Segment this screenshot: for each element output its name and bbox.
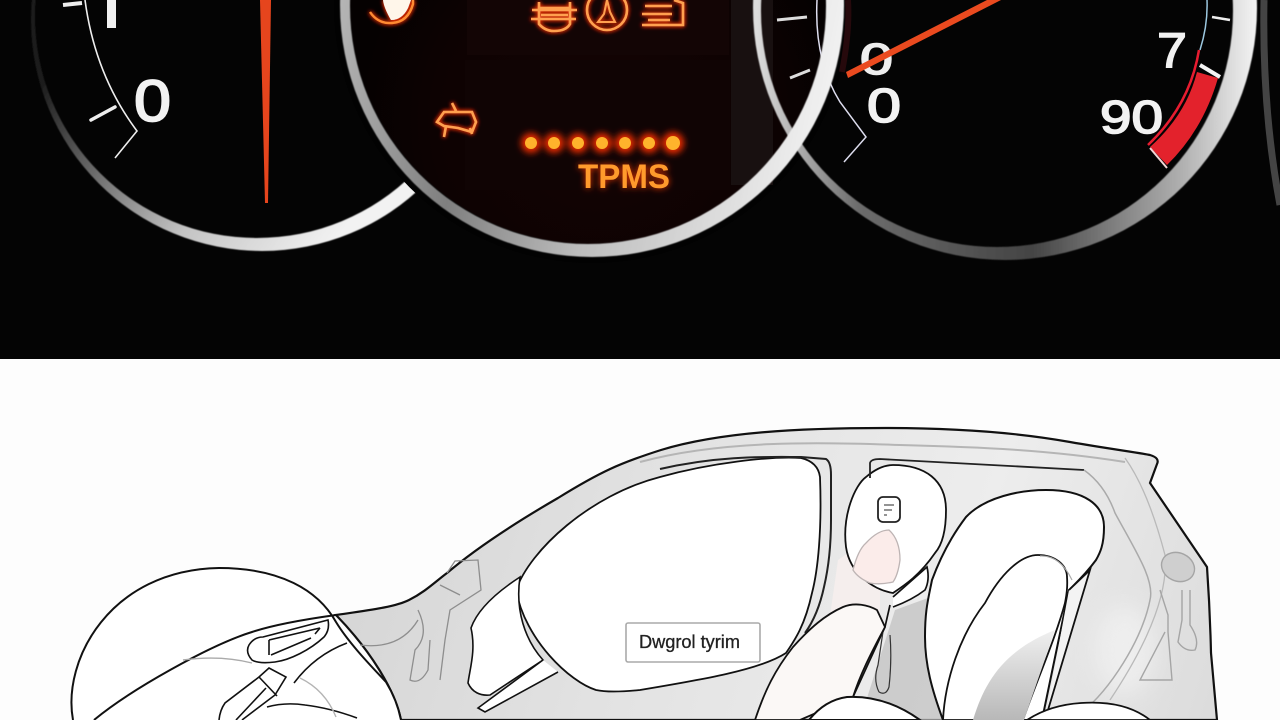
- needle: right gauge: [846, 0, 1001, 78]
- rear body details: [1140, 547, 1199, 680]
- lower door shading: [860, 598, 943, 720]
- rear door frame lines: [870, 458, 1165, 713]
- right gauge: [753, 0, 1257, 260]
- needle: left gauge: [260, 0, 271, 203]
- icon: rectangle symbol: [642, 0, 683, 25]
- steering wheel circle: [71, 568, 401, 720]
- stalk control upper: [248, 620, 328, 663]
- pillar seat belt: [853, 567, 928, 697]
- center gauge ring: [340, 0, 848, 257]
- warning icons row: [370, 0, 683, 137]
- digit: lower 0: 0: [867, 80, 901, 133]
- digit: 7: 7: [1157, 24, 1187, 78]
- seat shading: [973, 630, 1055, 720]
- center gauge face: [334, 0, 850, 263]
- front cushion: [809, 697, 920, 720]
- pillar shading: [815, 530, 880, 720]
- icon: small car symbol: [437, 103, 476, 137]
- mirror bar: [478, 660, 558, 712]
- red zone: [1148, 0, 1220, 168]
- car body silhouette: [336, 428, 1217, 720]
- body highlight haze: [1095, 605, 1155, 695]
- stalk control lower: [219, 643, 357, 720]
- dashboard gauge label: Dwgrol tyrim: [639, 632, 740, 652]
- digit: upper 0: 0: [860, 35, 893, 84]
- front seat outline: [755, 604, 885, 720]
- A-pillar details: [360, 560, 481, 681]
- window frame: [660, 457, 831, 633]
- icon: top-left warning glow: [370, 0, 413, 23]
- headrest shaded area: [853, 530, 900, 584]
- icon: headrest button: [878, 497, 900, 522]
- digit: 0 left gauge: 0: [134, 69, 171, 134]
- quarter window: [468, 577, 543, 695]
- rear seat strap: [1045, 570, 1090, 720]
- rear seat inner oval: [943, 555, 1072, 720]
- gray wheel line: [183, 658, 252, 663]
- panel: instrument cluster photo: [0, 0, 1280, 359]
- dashboard gauge label: [626, 623, 760, 662]
- rear seat shell: [925, 490, 1104, 720]
- icon: circled symbol: [587, 0, 627, 30]
- icon: stacked lines: [531, 2, 577, 31]
- TPMS indicator dots: [521, 132, 684, 154]
- digit: 1: [107, 0, 116, 28]
- TPMS label: TPMS: [578, 158, 670, 196]
- hood line across wheel: [94, 615, 336, 720]
- TPMS label: TPMS: [578, 158, 670, 196]
- gray wheel arc: [300, 678, 336, 717]
- left gauge: [31, 0, 493, 251]
- digit: 90: 90: [1100, 91, 1163, 143]
- rear cushion: [1027, 703, 1150, 720]
- headrest: [845, 465, 946, 593]
- far-right gauge edge: [1264, 0, 1280, 205]
- panel: vehicle cutaway diagram: [0, 359, 1280, 720]
- roof inner trim: [640, 443, 1125, 462]
- front side window: [516, 458, 821, 692]
